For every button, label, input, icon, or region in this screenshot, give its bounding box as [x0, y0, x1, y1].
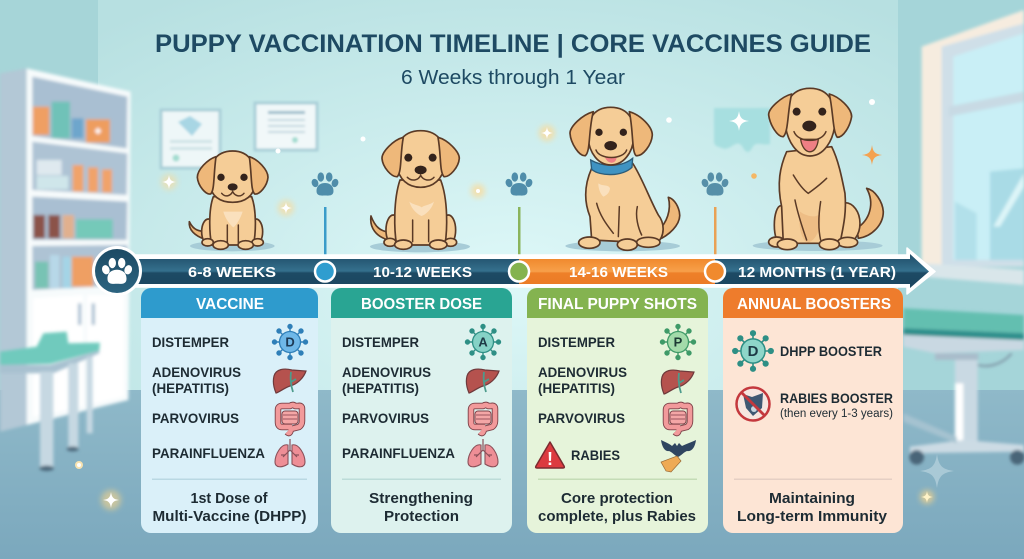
milestone dot green — [509, 262, 529, 282]
panel: vaccine 6-8 weeks — [141, 288, 318, 533]
icon: liver — [466, 369, 499, 393]
icon: virus P — [660, 324, 696, 360]
icon: intestines — [471, 405, 495, 433]
puppy 14-16 weeks — [565, 107, 680, 251]
label 6-8 weeks: 6-8 WEEKS — [188, 264, 276, 281]
icon: virus D: D — [285, 334, 295, 350]
footer note: Multi-Vaccine (DHPP) — [152, 508, 306, 525]
icon: lungs — [468, 439, 498, 467]
vaccine list — [342, 334, 455, 461]
footer note: 1st Dose of — [190, 490, 268, 507]
icon: bat and dog — [661, 440, 696, 472]
left exam table — [0, 332, 100, 471]
footer note: Core protection — [561, 490, 673, 507]
clinic certificates — [161, 103, 770, 168]
icon: rabies prohibited — [736, 388, 770, 420]
rabies booster label — [780, 390, 893, 420]
label 14-16 weeks: 14-16 WEEKS — [569, 264, 668, 281]
panel: final shots 14-16 weeks — [527, 288, 708, 533]
footer note: Maintaining — [769, 490, 855, 507]
window — [922, 10, 1024, 285]
vaccine list: DISTEMPER — [152, 334, 229, 350]
heading: ANNUAL BOOSTERS — [737, 296, 891, 313]
vaccine list: PARVOVIRUS — [342, 410, 429, 426]
rabies booster label: RABIES BOOSTER — [780, 390, 893, 406]
footer note — [152, 490, 306, 525]
footer note: Long-term Immunity — [737, 508, 888, 525]
vaccine list — [152, 334, 265, 461]
icon: virus D booster: D — [748, 343, 759, 360]
paw marker and stem: 14-16 weeks — [700, 172, 730, 255]
vaccine list: PARVOVIRUS — [152, 410, 239, 426]
paw marker and stem: 6-8 weeks — [310, 172, 340, 255]
puppy 10-12 weeks — [370, 131, 470, 252]
vaccine list: (HEPATITIS) — [152, 380, 229, 396]
heading: BOOSTER DOSE — [361, 296, 482, 313]
icon: intestines — [666, 405, 690, 433]
sparkles — [75, 99, 954, 510]
icon: virus P: P — [674, 334, 683, 350]
icon: virus A: A — [478, 334, 488, 350]
heading: FINAL PUPPY SHOTS — [538, 296, 697, 313]
subtitle: 6 Weeks through 1 Year — [401, 67, 625, 89]
footer note — [369, 490, 473, 525]
footer note — [737, 490, 888, 525]
footer note: complete, plus Rabies — [538, 508, 696, 525]
vaccine list — [538, 334, 627, 463]
vaccine list: DISTEMPER — [342, 334, 419, 350]
icon: warning triangle — [536, 442, 564, 469]
icon: virus A — [466, 324, 500, 360]
vaccine list: PARAINFLUENZA — [152, 445, 265, 461]
DHPP booster label: DHPP BOOSTER — [780, 343, 882, 359]
rabies booster label: (then every 1-3 years) — [780, 408, 893, 420]
icon: virus D — [272, 324, 308, 360]
vaccine list: ADENOVIRUS — [538, 364, 627, 380]
vaccine list: (HEPATITIS) — [342, 380, 419, 396]
heading: VACCINE — [196, 296, 264, 313]
icon: liver — [661, 370, 694, 394]
vaccine list: RABIES — [571, 447, 620, 463]
panel: annual boosters 12 months — [723, 288, 903, 533]
label 10-12 weeks: 10-12 WEEKS — [373, 264, 472, 281]
vaccine list: PARAINFLUENZA — [342, 445, 455, 461]
vaccine list: DISTEMPER — [538, 334, 615, 350]
footer note — [538, 490, 696, 525]
shelf cabinet — [0, 68, 131, 432]
milestone dot orange — [705, 262, 725, 282]
title: PUPPY VACCINATION TIMELINE | CORE VACCINES GUIDE — [155, 30, 871, 58]
panel: booster 10-12 weeks — [331, 288, 512, 533]
vaccine list: PARVOVIRUS — [538, 410, 625, 426]
icon: lungs — [275, 439, 305, 467]
timeline arrow — [92, 246, 935, 296]
icon: virus D booster — [733, 331, 773, 371]
icon: warning triangle: ! — [547, 449, 553, 469]
milestone dot blue — [315, 262, 335, 282]
paw marker and stem: 10-12 weeks — [504, 172, 534, 255]
vaccine list: ADENOVIRUS — [342, 364, 431, 380]
icon: liver — [273, 369, 306, 393]
vaccine list: (HEPATITIS) — [538, 380, 615, 396]
paw badge — [92, 246, 142, 296]
footer note: Protection — [384, 508, 459, 525]
vaccine list: ADENOVIRUS — [152, 364, 241, 380]
icon: intestines — [278, 405, 302, 433]
puppy 6-8 weeks — [189, 151, 275, 251]
label 12 months: 12 MONTHS (1 YEAR) — [738, 264, 896, 281]
adult dog 12 months — [753, 88, 883, 251]
right exam table — [903, 308, 1024, 465]
footer note: Strengthening — [369, 490, 473, 507]
